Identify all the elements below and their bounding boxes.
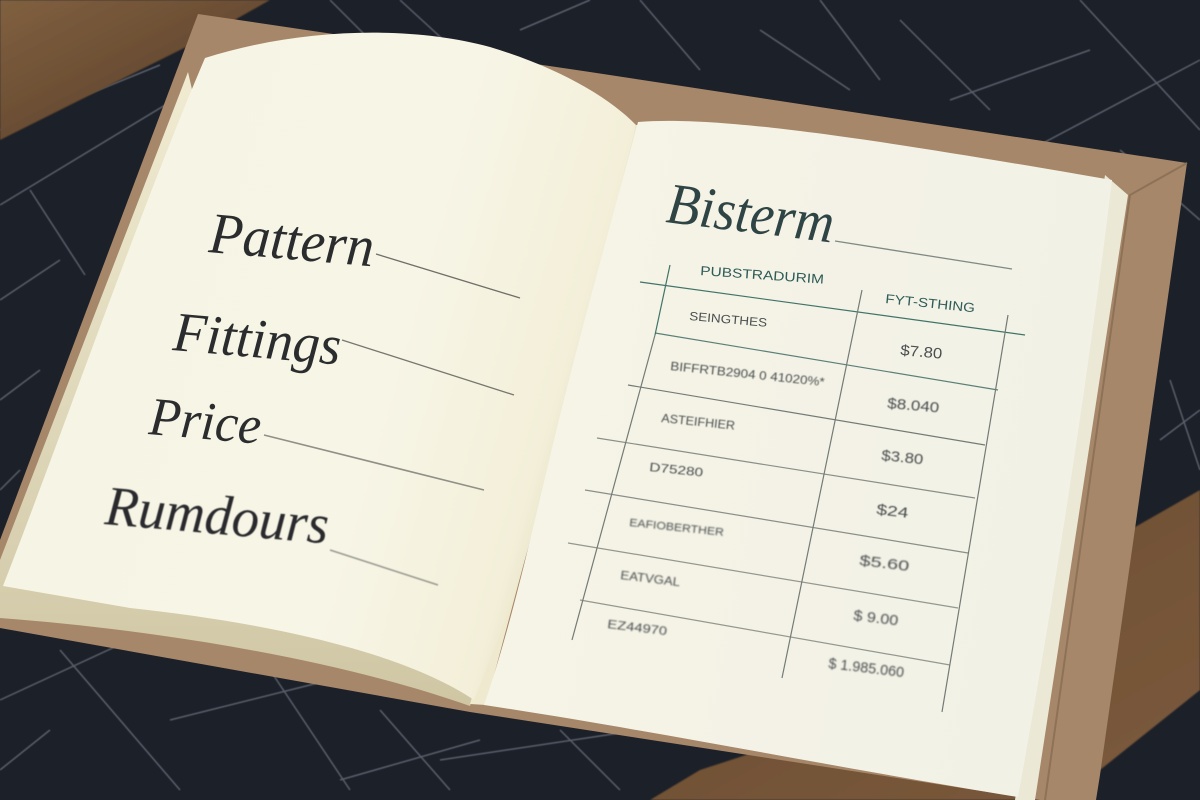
spine fill bbox=[470, 125, 640, 705]
heading: Pattern: Pattern bbox=[206, 200, 377, 279]
heading: Fittings bbox=[170, 301, 514, 395]
left page bbox=[3, 33, 636, 700]
right page bbox=[484, 121, 1112, 797]
heading: Bisterm bbox=[663, 170, 1012, 269]
cover corner fold bbox=[1045, 163, 1187, 800]
table price values: $8.040 bbox=[887, 395, 940, 417]
heading: Rumdours bbox=[102, 475, 438, 585]
heading: Fittings: Fittings bbox=[170, 301, 344, 378]
wood table top-left bbox=[0, 0, 270, 140]
left page stack bbox=[0, 72, 500, 706]
table price values: $24 bbox=[876, 501, 909, 522]
right page stack edge bbox=[1015, 175, 1128, 800]
heading: Pattern bbox=[206, 200, 520, 298]
table price values: $7.80 bbox=[900, 342, 943, 363]
table row labels: SEINGTHES bbox=[689, 309, 768, 330]
table row labels: EAFIOBERTHER bbox=[629, 517, 724, 539]
table grid bbox=[568, 265, 1025, 712]
price table bbox=[568, 263, 1025, 712]
table price values: $ 9.00 bbox=[853, 607, 899, 629]
table header labels bbox=[700, 263, 976, 315]
heading: Rumdours: Rumdours bbox=[102, 475, 331, 556]
table price values bbox=[828, 342, 943, 681]
table header labels: FYT-STHING bbox=[885, 291, 976, 315]
wood table bottom-right bbox=[650, 490, 1200, 800]
heading: Price: Price bbox=[146, 386, 264, 456]
table row labels: EATVGAL bbox=[620, 568, 681, 589]
table row labels: ASTEIFHIER bbox=[661, 411, 736, 433]
table price values: $3.80 bbox=[881, 447, 924, 468]
table header labels: PUBSTRADURIM bbox=[700, 263, 825, 287]
table row labels: EZ44970 bbox=[607, 617, 668, 638]
heading: Price bbox=[146, 386, 484, 490]
table row labels bbox=[607, 309, 826, 638]
heading: Bisterm: Bisterm bbox=[663, 170, 838, 255]
table price values: $5.60 bbox=[859, 552, 910, 575]
table price values: $ 1.985.060 bbox=[828, 655, 905, 681]
table row labels: BIFFRTB2904 0 41020%* bbox=[670, 359, 826, 389]
table row labels: D75280 bbox=[649, 460, 704, 480]
